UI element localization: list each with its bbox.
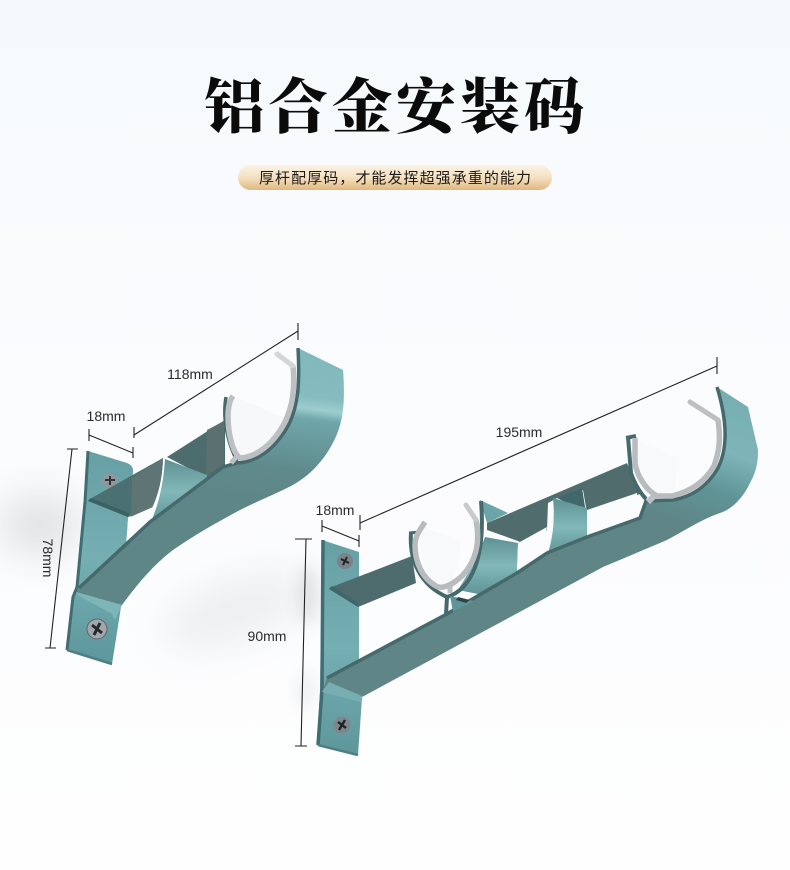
- right bracket rear bar near wall: [329, 556, 416, 607]
- right bracket upper screw: [337, 553, 353, 569]
- left bracket wall plate: [67, 451, 133, 664]
- dimension: left height 78mm: [40, 449, 78, 648]
- left bracket rear bar: [88, 420, 225, 517]
- left bracket clip: [228, 354, 294, 463]
- subtitle pill: [238, 165, 552, 190]
- right bracket middle socket: [458, 500, 518, 595]
- left bracket upper screw: [102, 473, 118, 489]
- dimension: right thickness 18mm: [316, 502, 359, 547]
- right bracket near socket ring: [409, 501, 482, 615]
- right bracket lower screw: [334, 716, 350, 734]
- right bracket wall plate: [317, 540, 362, 755]
- right bracket far socket lip: [626, 436, 646, 499]
- right bracket windows: [517, 493, 638, 573]
- dimension: left height 78mm: 78mm: [40, 539, 56, 577]
- dimension: right thickness 18mm: 18mm: [316, 502, 354, 518]
- dimension: left length 118mm: [134, 323, 298, 438]
- right bracket rear bar centre: [487, 463, 640, 550]
- dimension: right length 195mm: [360, 357, 717, 530]
- right bracket rear bar shading: [557, 488, 586, 513]
- left single bracket: [67, 348, 344, 664]
- left bracket lower screw: [87, 619, 107, 639]
- title: 铝合金安装码: [204, 75, 588, 141]
- left bracket socket lip: [225, 397, 237, 462]
- left bracket arm: [76, 348, 344, 620]
- dimension: right height 90mm: 90mm: [248, 628, 286, 644]
- dimension: right height 90mm: [248, 539, 312, 746]
- left bracket middle web: [150, 459, 207, 524]
- right bracket middle web: [547, 498, 587, 556]
- right bracket far clip: [635, 402, 719, 502]
- right bracket near clip: [415, 505, 478, 593]
- right bracket arm: [322, 387, 758, 702]
- dimension: left length 118mm: 118mm: [167, 366, 213, 382]
- left bracket lower windows: [127, 467, 222, 541]
- dimension: right length 195mm: 195mm: [496, 424, 542, 440]
- wall shadows: [0, 495, 318, 710]
- dimension: left thickness 18mm: 18mm: [87, 408, 125, 424]
- right double bracket: [317, 387, 758, 755]
- dimension: left thickness 18mm: [87, 408, 133, 458]
- subtitle pill: 厚杆配厚码，才能发挥超强承重的能力: [259, 170, 531, 187]
